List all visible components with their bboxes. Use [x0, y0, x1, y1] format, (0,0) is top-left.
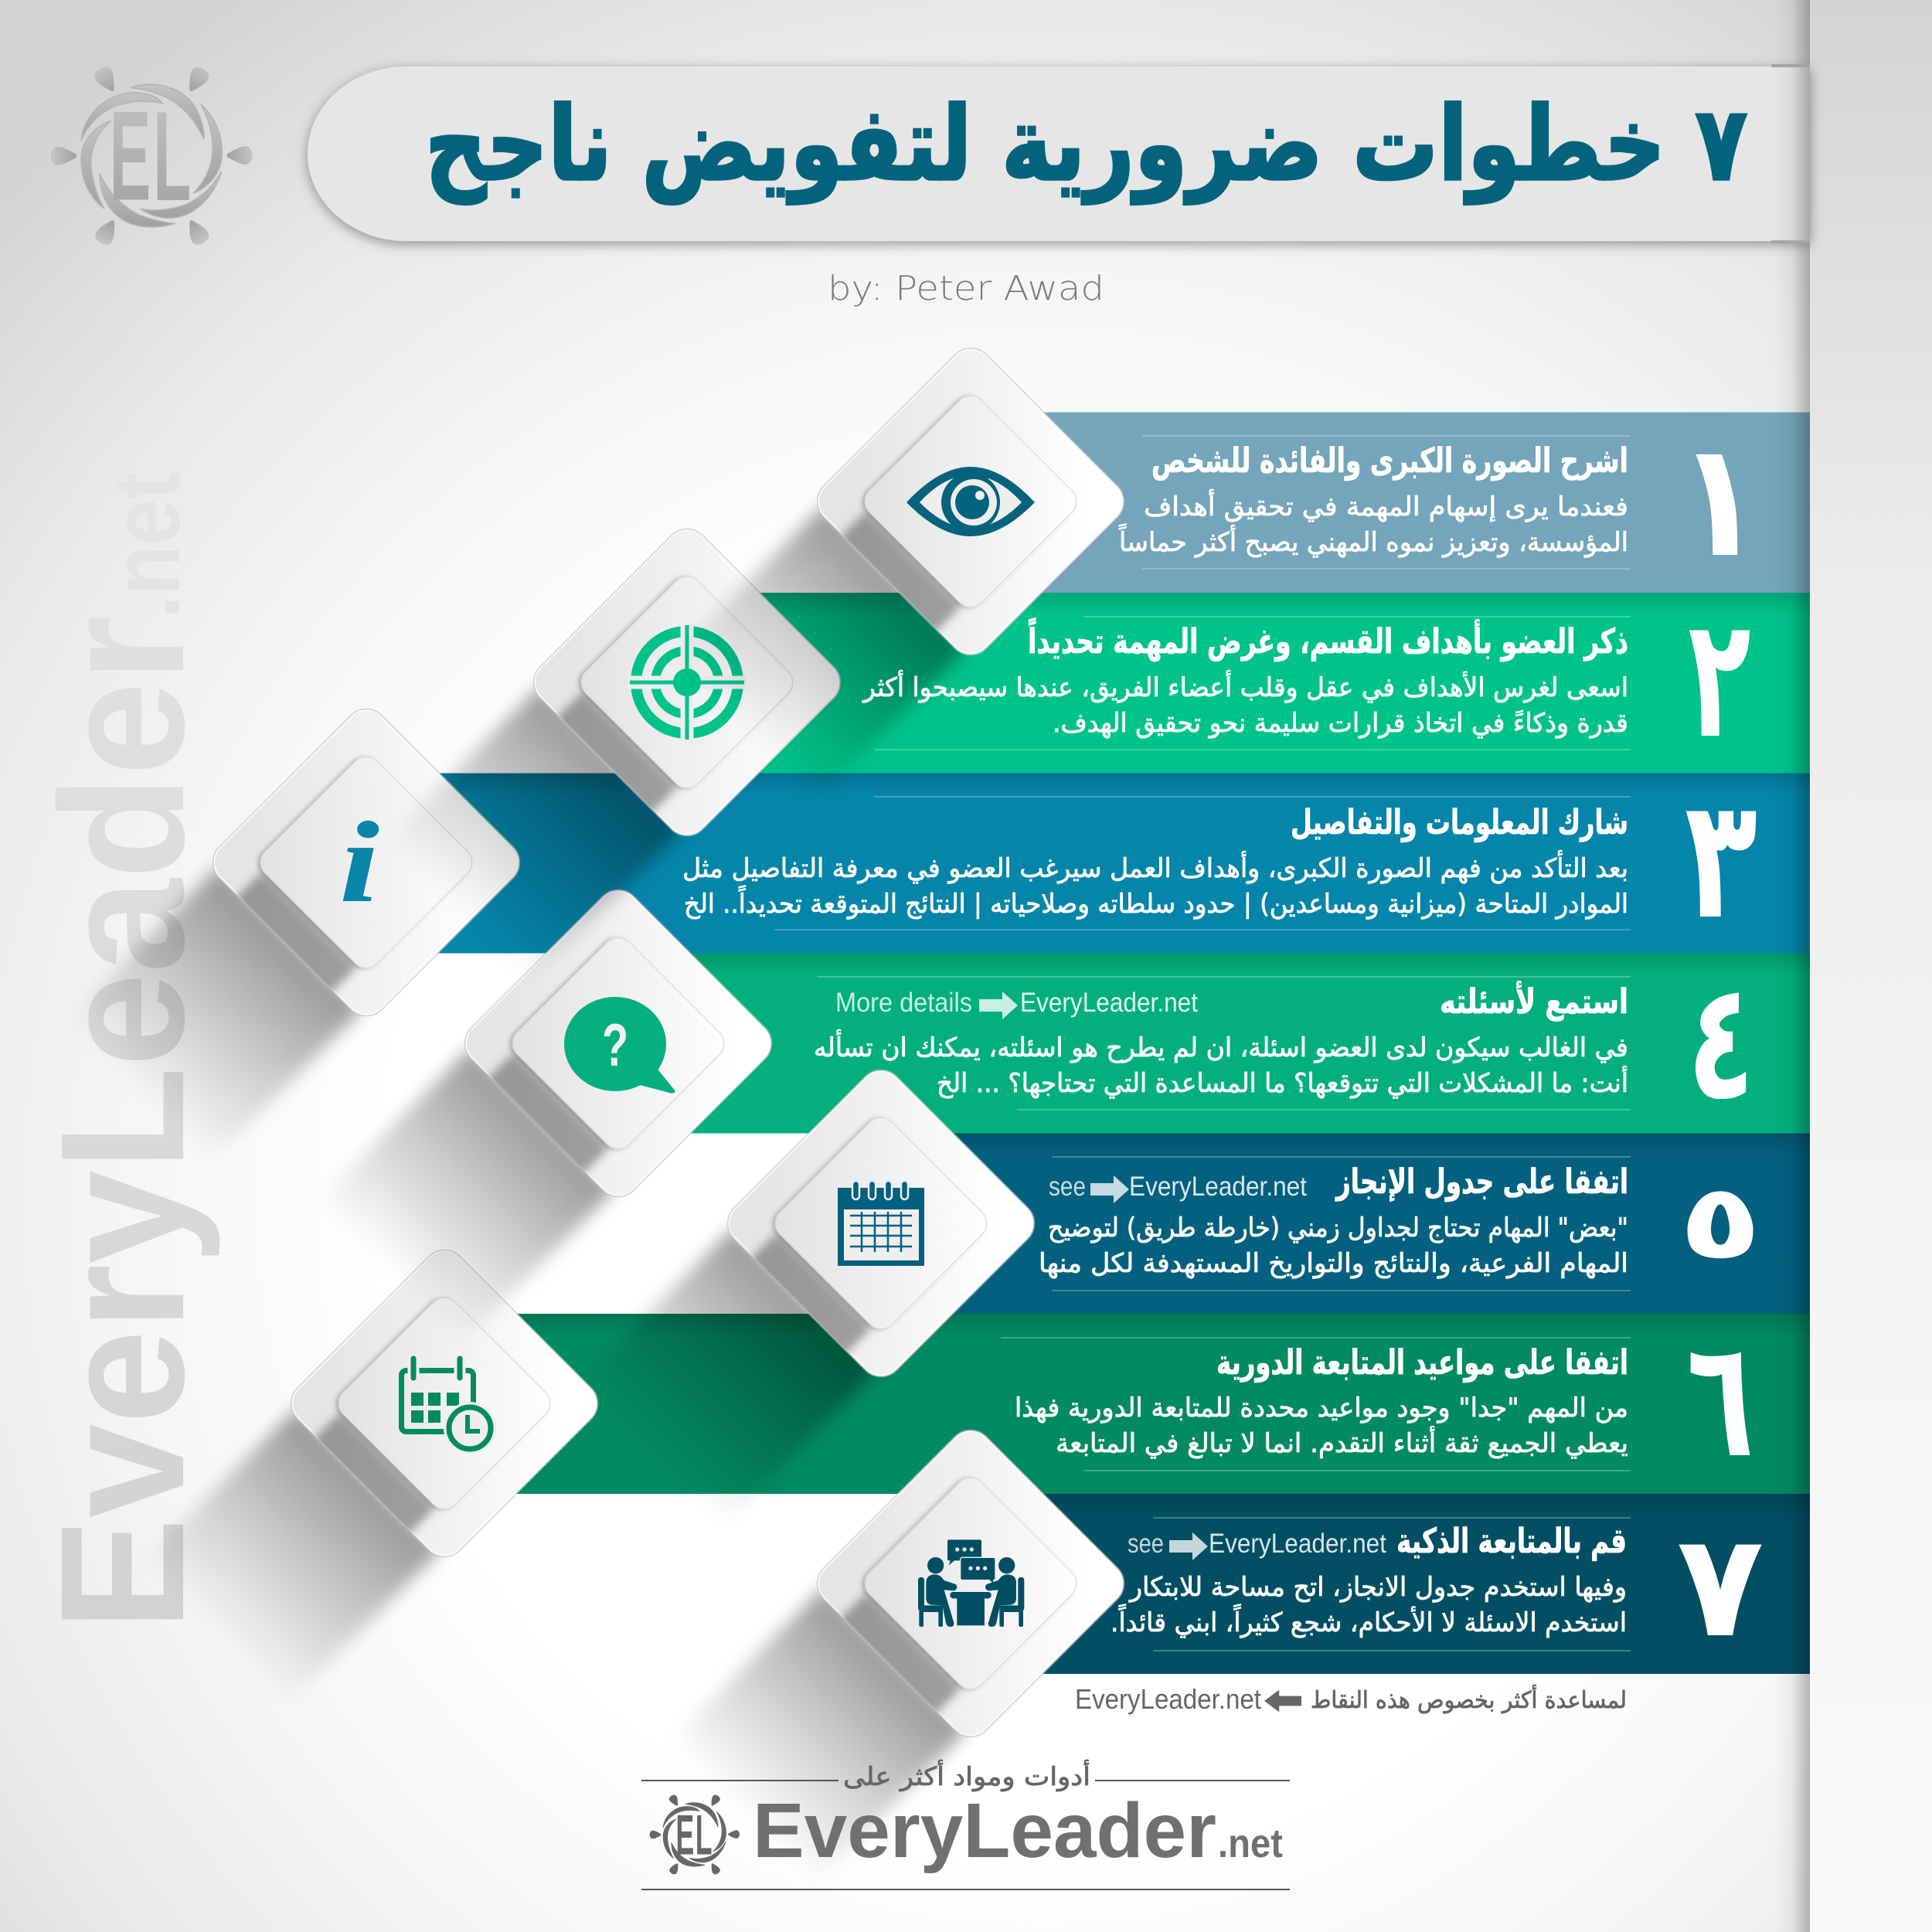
- row 1 text: اشرح الصورة الكبرى والفائدة للشخص: [1151, 441, 1628, 481]
- row 4 text: استمع لأسئلته: [1440, 981, 1628, 1022]
- tile 1 shadow: [662, 505, 967, 811]
- footer wordmark: .net: [1218, 1821, 1283, 1866]
- row 3 text: بعد التأكد من فهم الصورة الكبرى، وأهداف العمل سيرغب العضو في معرفة التفاصيل مثل: [682, 850, 1628, 884]
- bar top shading: [366, 593, 1810, 1517]
- row 7 text: ٧: [1677, 1502, 1764, 1669]
- tile 3: info icon: i: [339, 798, 379, 927]
- watermark: EveryLeader.net vertical: .net: [93, 472, 200, 618]
- row 5 text: ٥: [1679, 1162, 1762, 1282]
- tile 4: question bubble icon: ?: [602, 1012, 628, 1079]
- row 4 text: في الغالب سيكون لدى العضو اسئلة، ان لم يطرح هو اسئلته، يمكنك ان تسأله: [814, 1029, 1628, 1063]
- tile 4: question bubble icon: [457, 882, 780, 1205]
- row 2 text: اسعى لغرس الأهداف في عقل وقلب أعضاء الفريق، عندها سيصبحوا أكثر: [862, 670, 1628, 703]
- tile 6: calendar with clock icon: [283, 1242, 606, 1565]
- row 4 text: More details: [835, 988, 972, 1018]
- row 1 text: [1118, 408, 1763, 592]
- row 2 text: قدرة وذكاءً في اتخاذ قرارات سليمة نحو تحقيق الهدف.: [1053, 708, 1628, 739]
- right side strip: [1810, 0, 1932, 1932]
- row 6 text: من المهم "جدا" وجود مواعيد محددة للمتابعة الدورية فهذا: [1015, 1393, 1628, 1423]
- tile 2: target icon: [526, 521, 849, 844]
- row 3 text: شارك المعلومات والتفاصيل: [1291, 803, 1628, 842]
- row 4 text: EveryLeader.net: [1020, 988, 1198, 1018]
- row 2 text: [862, 583, 1751, 776]
- row 5 text: [1039, 1156, 1762, 1291]
- row 7 text: see: [1128, 1529, 1164, 1559]
- footnote: لمساعدة أكثر بخصوص هذه النقاط: [1311, 1684, 1627, 1714]
- row 6 text: ٦: [1686, 1305, 1754, 1494]
- footnote: [1075, 1683, 1627, 1715]
- row 3 text: ٣: [1685, 763, 1757, 957]
- watermark: EveryLeader.net vertical: EveryLeader: [25, 616, 221, 1631]
- row 4 text: [814, 947, 1755, 1136]
- tile 7 shadow: [662, 1587, 967, 1893]
- row 7 text: EveryLeader.net: [1209, 1529, 1386, 1559]
- row 5 text: see: [1049, 1172, 1086, 1202]
- tile 3 shadow: [57, 866, 362, 1172]
- tile 3: info icon: [205, 701, 528, 1024]
- tile 4 shadow: [309, 1047, 614, 1352]
- bar 1: [971, 413, 1810, 593]
- row 2 text: ذكر العضو بأهداف القسم، وغرض المهمة تحديداً: [1028, 617, 1628, 662]
- footer logo wheel: [650, 1794, 740, 1876]
- row 4 text: ٤: [1687, 947, 1755, 1136]
- row 1 text: ١: [1676, 408, 1763, 592]
- title: ٧ خطوات ضرورية لتفويض ناجح: [425, 85, 1747, 205]
- bar 2: [687, 593, 1810, 773]
- row 7 text: [1111, 1502, 1764, 1669]
- row 5 text: EveryLeader.net: [1129, 1172, 1307, 1202]
- row 7 text: استخدم الاسئلة لا الأحكام، شجع كثيراً، ابني قائداً.: [1111, 1604, 1627, 1638]
- row 3 text: الموادر المتاحة (ميزانية ومساعدين) | حدود سلطاته وصلاحياته | النتائج المتوقعة تحديداً.. الخ: [684, 885, 1628, 920]
- title ribbon: [308, 66, 1810, 241]
- row 5 text: اتفقا على جدول الإنجاز: [1335, 1162, 1628, 1202]
- ribbon fold tabs: [1771, 64, 1810, 243]
- footnote: EveryLeader.net: [1075, 1683, 1261, 1715]
- row 5 text: المهام الفرعية، والنتائج والتواريخ المستهدفة لكل منها: [1039, 1248, 1628, 1279]
- tile 5 shadow: [572, 1227, 877, 1532]
- tile 6 shadow: [135, 1407, 440, 1713]
- tile 5: calendar icon: [719, 1062, 1043, 1385]
- footer heading with rules: أدوات ومواد أكثر على: [843, 1760, 1090, 1791]
- author: by: Peter Awad: [828, 269, 1104, 308]
- row 5 text: "بعض" المهام تحتاج لجداول زمني (خارطة طريق) لتوضيح: [1048, 1213, 1628, 1243]
- bar 7: [971, 1494, 1810, 1674]
- row 7 text: قم بالمتابعة الذكية: [1396, 1522, 1627, 1561]
- bar 4: [618, 954, 1810, 1133]
- row 4 text: أنت: ما المشكلات التي تتوقعها؟ ما المساعدة التي تحتاجها؟ ... الخ: [937, 1066, 1628, 1099]
- tile 7: team meeting icon: [809, 1422, 1132, 1745]
- row 6 text: اتفقا على مواعيد المتابعة الدورية: [1216, 1343, 1628, 1383]
- logo: top-left EL wheel: [51, 64, 252, 247]
- bar 3: [366, 773, 1810, 954]
- tile 2 shadow: [378, 686, 683, 992]
- bar 6: [444, 1314, 1810, 1494]
- row 7 text: وفيها استخدم جدول الانجاز، اتح مساحة للابتكار: [1128, 1572, 1627, 1603]
- row 6 text: [1001, 1305, 1754, 1494]
- row 1 text: المؤسسة، وتعزيز نموه المهني يصبح أكثر حماساً: [1118, 523, 1628, 558]
- row 6 text: يعطي الجميع ثقة أثناء التقدم. انما لا تبالغ في المتابعة: [1056, 1426, 1628, 1459]
- footer wordmark: EveryLeader: [753, 1787, 1216, 1874]
- row 1 text: فعندما يرى إسهام المهمة في تحقيق أهداف: [1144, 489, 1628, 522]
- row 2 text: ٢: [1688, 583, 1751, 776]
- row 3 text: [682, 763, 1757, 957]
- tile 1: eye icon: [809, 340, 1132, 663]
- bar 5: [881, 1133, 1810, 1314]
- page fold shadow: [1774, 0, 1810, 1932]
